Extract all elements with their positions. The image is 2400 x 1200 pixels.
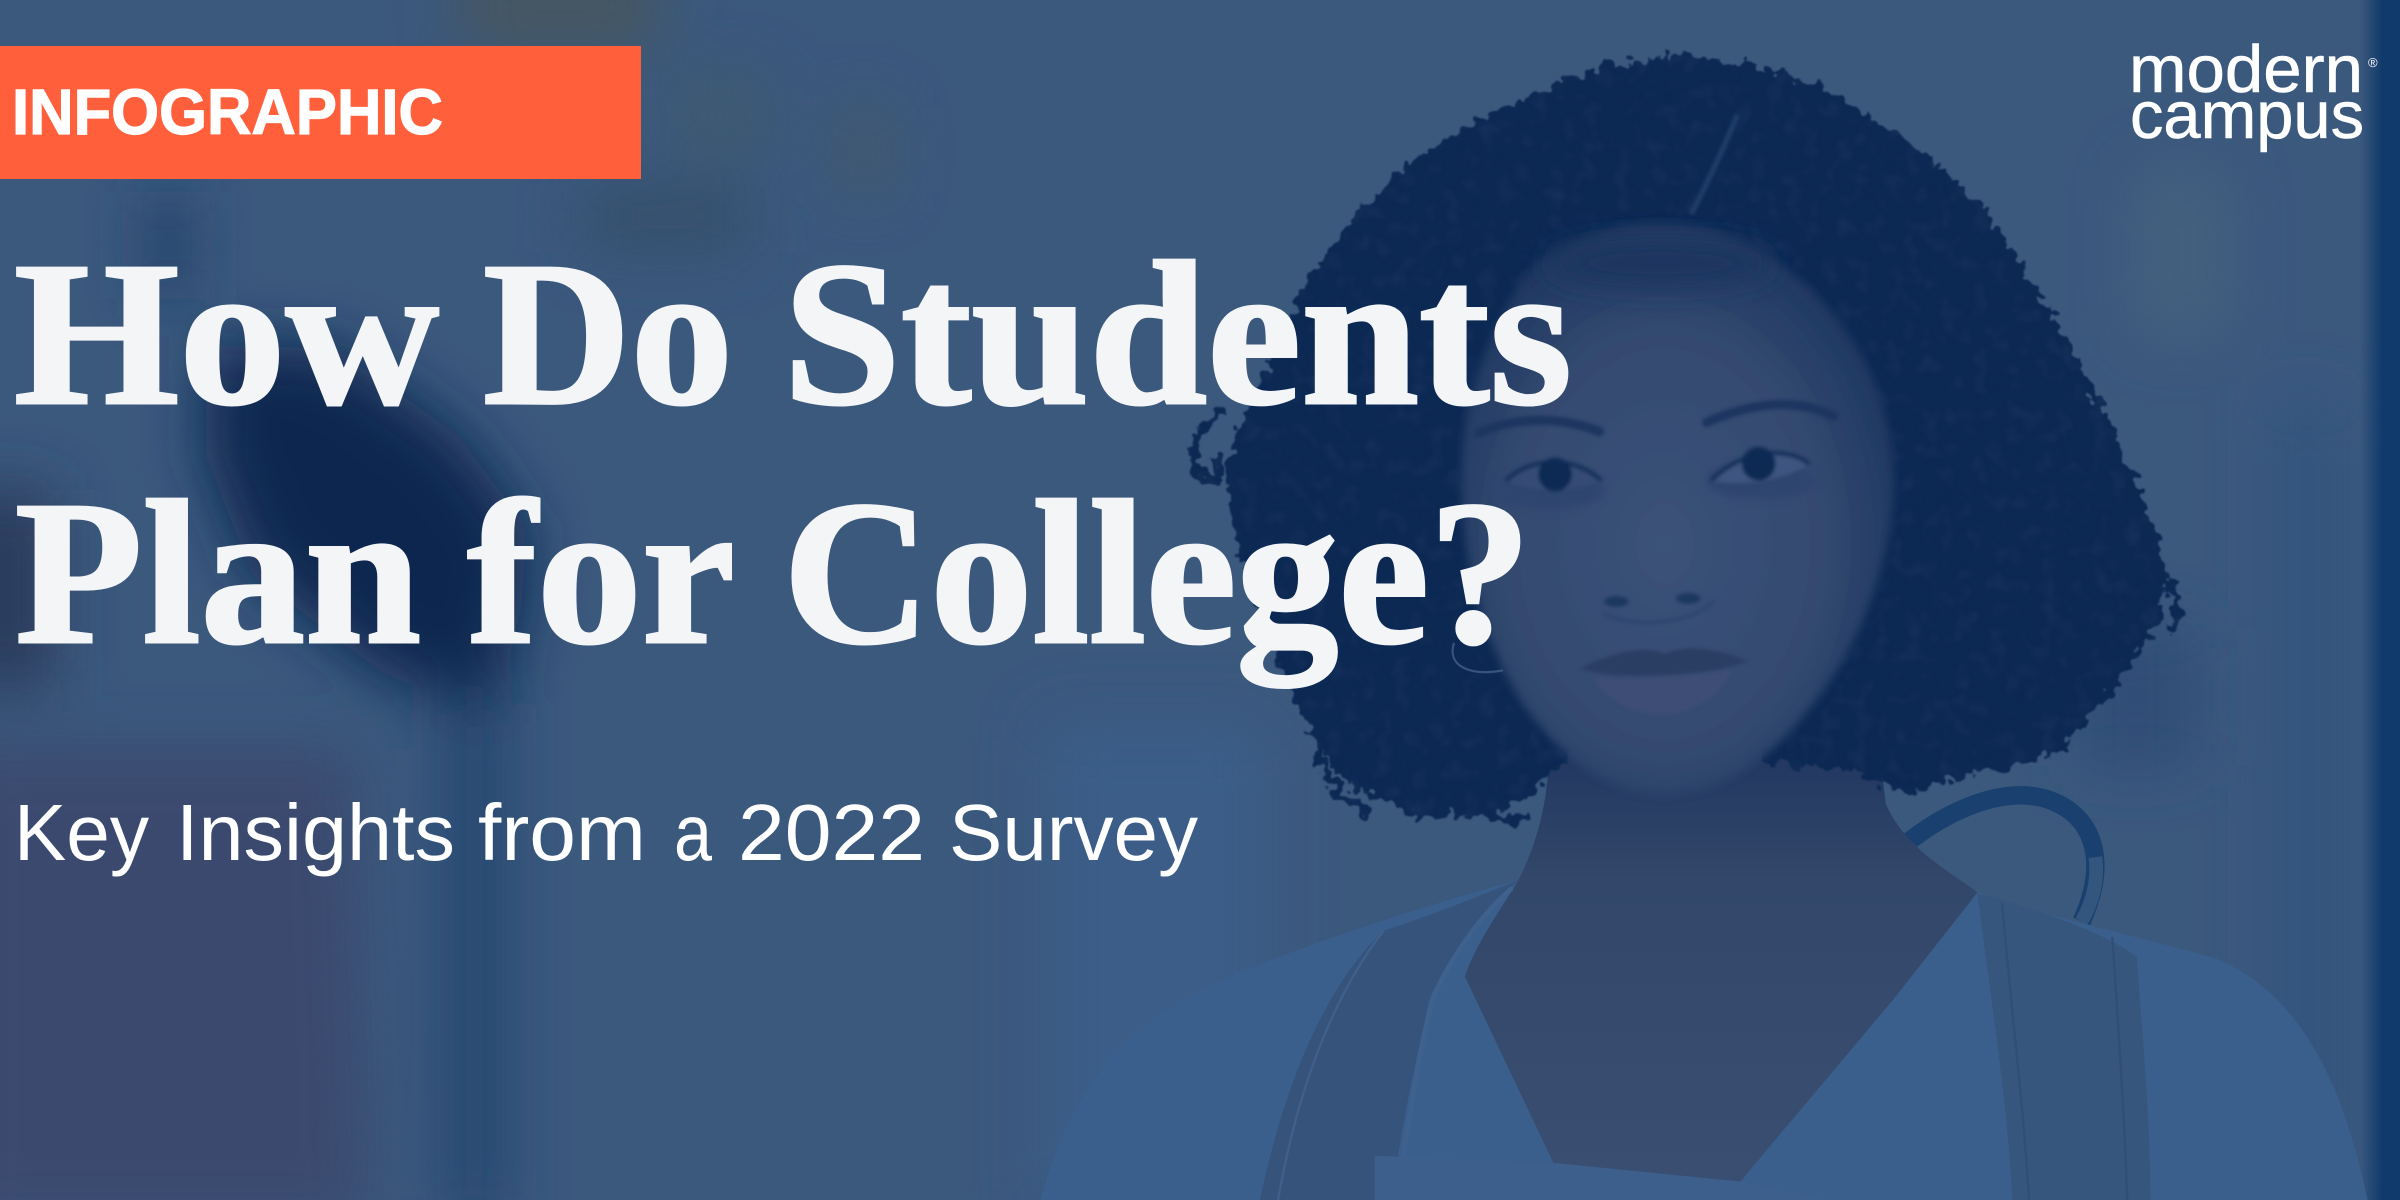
banner label: INFOGRAPHIC	[12, 76, 443, 148]
title: Do	[483, 219, 733, 448]
eyebrows	[1479, 404, 1834, 433]
shirt	[1038, 880, 2369, 1200]
logo: modern campus: modern	[2129, 32, 2363, 107]
right backpack strap	[1978, 894, 2150, 1200]
subtitle: Key	[14, 788, 149, 877]
right eye	[1711, 447, 1809, 483]
left backpack strap	[1258, 880, 1518, 1200]
hair parting	[1691, 115, 1737, 214]
title: How	[14, 219, 439, 448]
forehead shadow	[1546, 239, 1775, 288]
nose	[1603, 593, 1714, 623]
lips	[1580, 648, 1748, 715]
banner	[0, 46, 641, 179]
title	[14, 219, 1572, 687]
logo: modern campus: ®	[2368, 55, 2378, 70]
subtitle: from	[478, 788, 646, 877]
subtitle: 2022	[738, 788, 925, 877]
curly hair	[1194, 57, 2178, 820]
subtitle: a	[674, 788, 712, 877]
under-eye shadow	[1494, 462, 1815, 510]
title: Plan	[15, 458, 421, 687]
subtitle: Survey	[949, 788, 1198, 877]
left eye	[1506, 458, 1601, 491]
face	[1462, 223, 1893, 796]
subtitle	[14, 788, 1198, 877]
earring	[1453, 643, 1503, 672]
subtitle: Insights	[176, 788, 455, 877]
logo: modern campus	[2129, 32, 2378, 153]
title: College?	[783, 458, 1531, 687]
logo: modern campus: campus	[2130, 78, 2364, 153]
neck and chest	[1465, 750, 1978, 1182]
title: for	[467, 458, 735, 687]
title: Students	[783, 219, 1572, 448]
backpack top handle	[1903, 795, 2096, 921]
book held at chest	[1374, 1156, 1875, 1200]
